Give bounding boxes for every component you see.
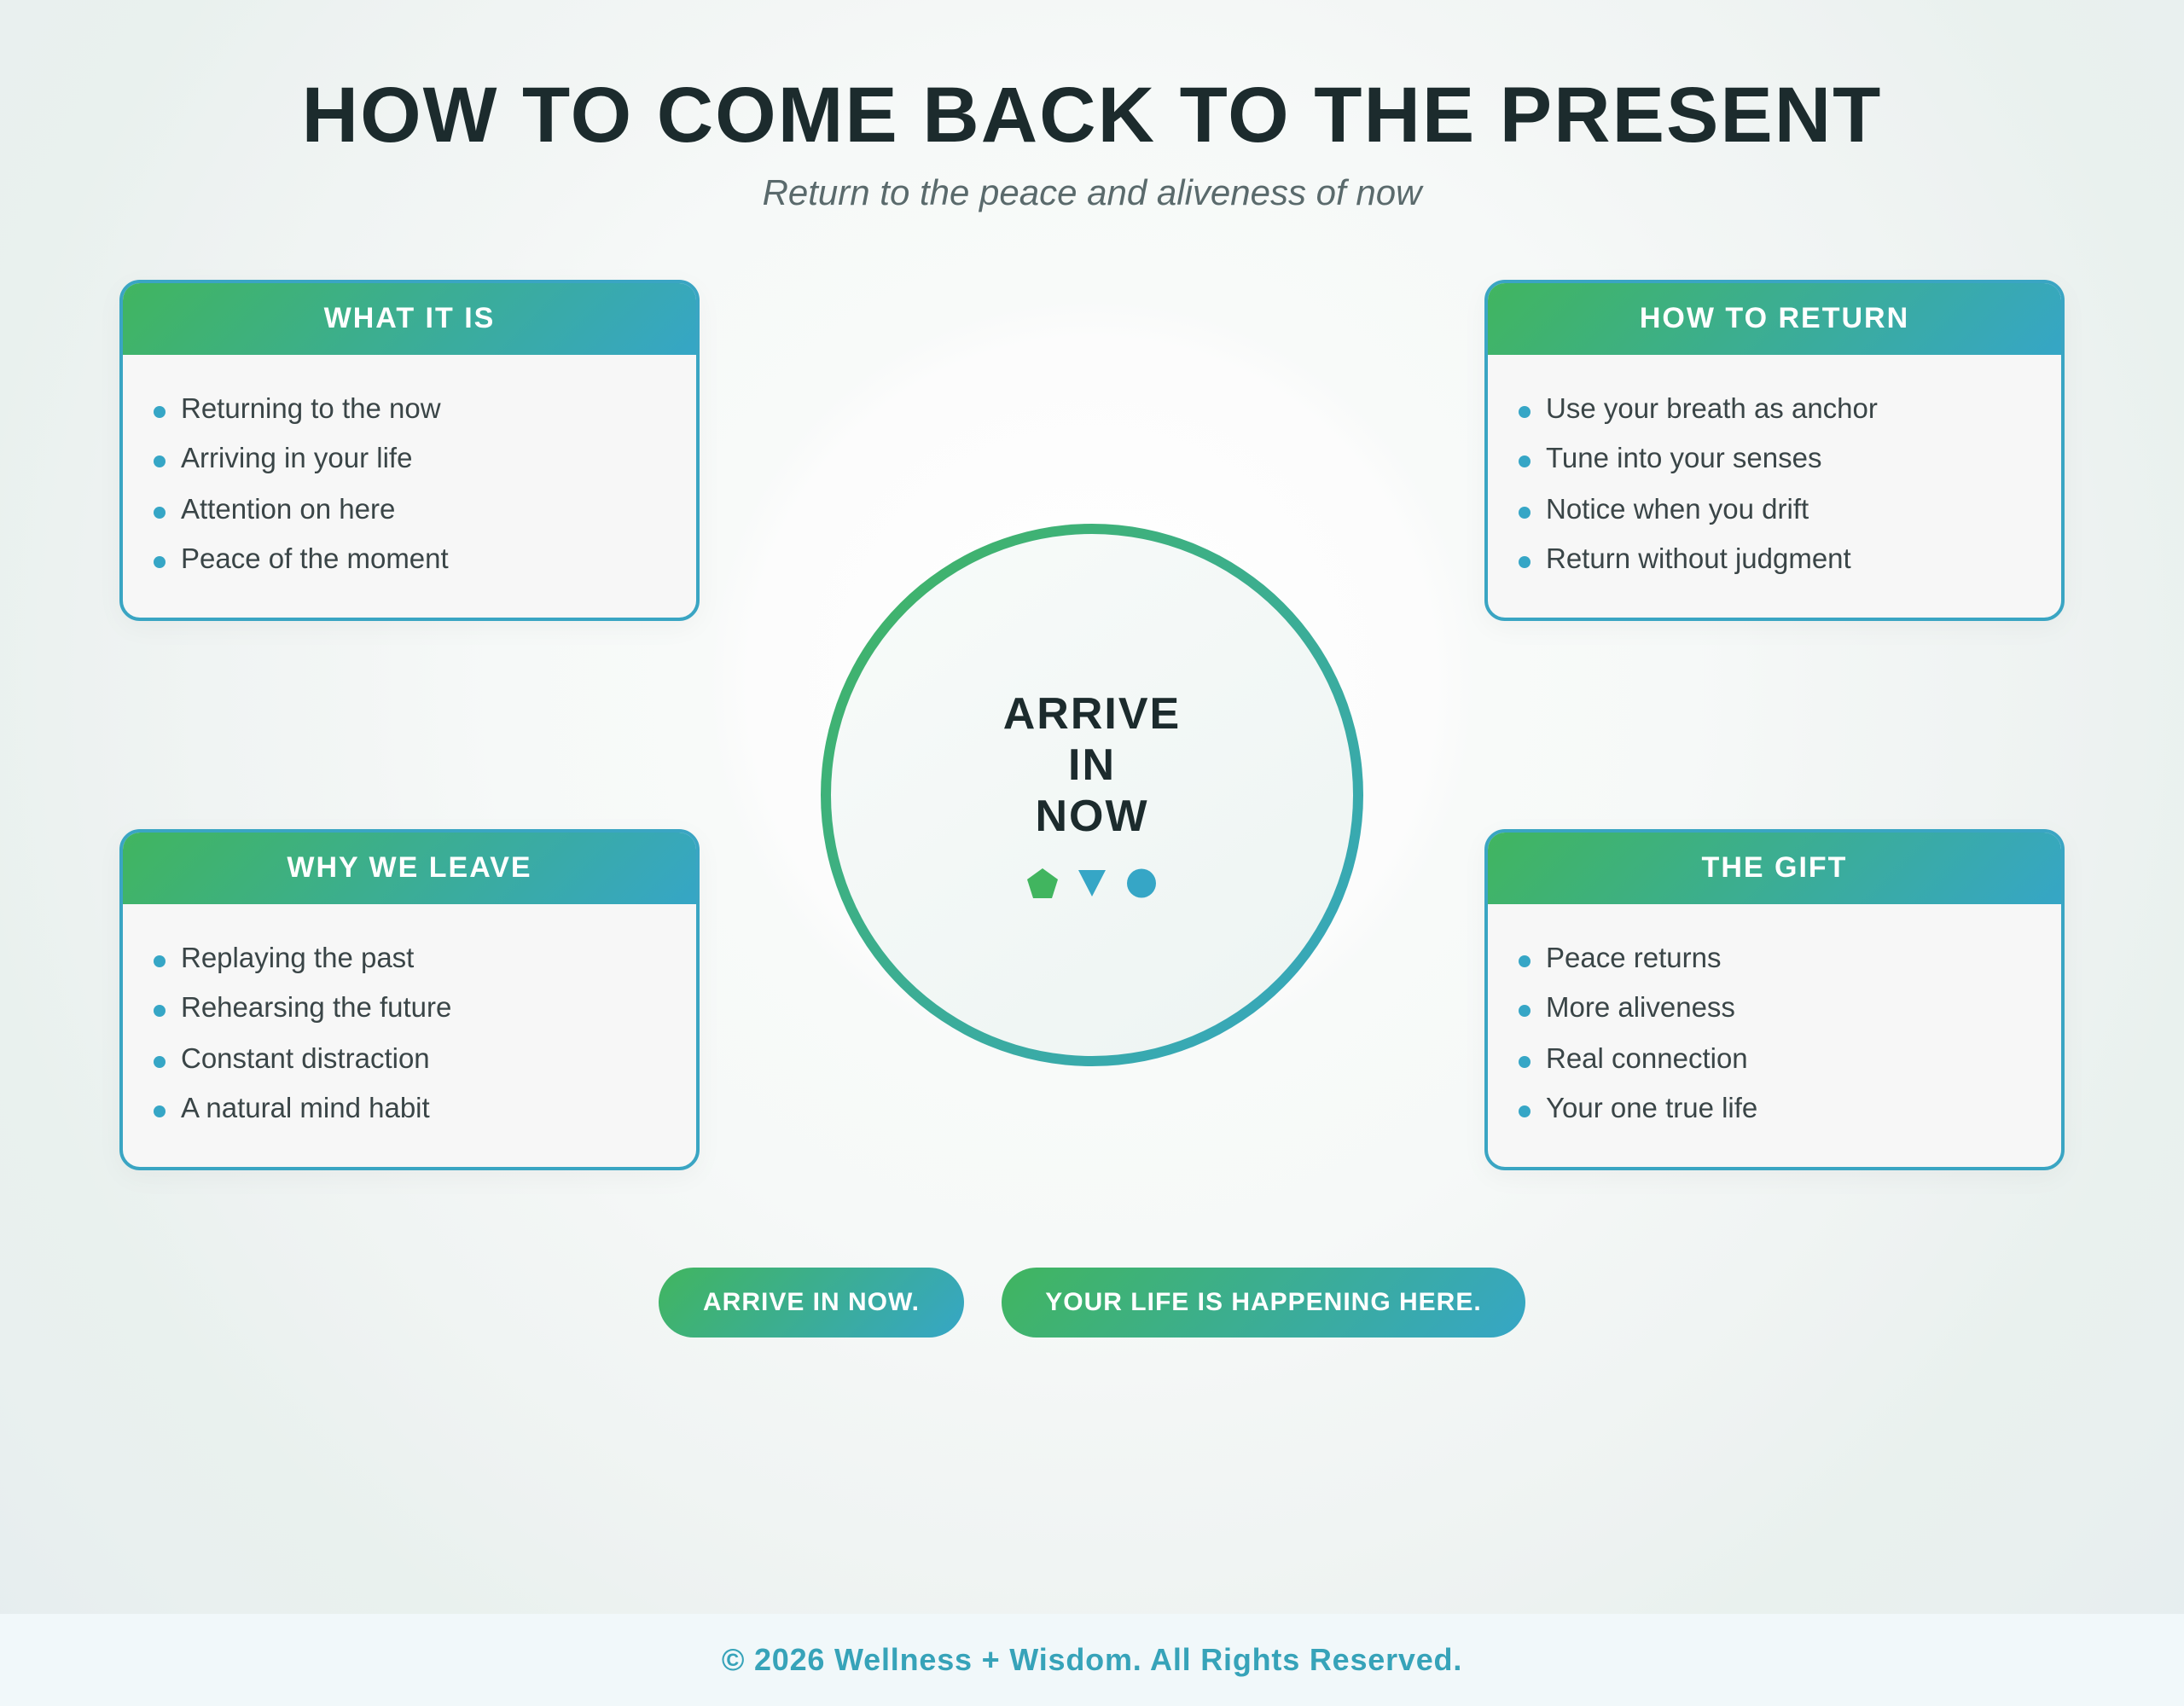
heading: why we leave <box>123 831 696 904</box>
panel: what it is <box>119 280 700 621</box>
center text: NOW <box>1035 792 1149 841</box>
footer: © 2026 Wellness + Wisdom. All Rights Reserved. <box>722 1642 1462 1677</box>
heading: why we leave: WHY WE LEAVE <box>287 851 532 884</box>
heading: how to return: HOW TO RETURN <box>1640 302 1909 334</box>
panel: the gift <box>1484 829 2065 1170</box>
list item: Tune into your senses <box>1546 442 1821 473</box>
list item: More aliveness <box>1546 991 1735 1023</box>
list item: Arriving in your life <box>181 442 412 473</box>
callout pill: arrive in now <box>659 1268 964 1338</box>
subtitle: Return to the peace and aliveness of now <box>763 172 1421 212</box>
list item: Constant distraction <box>181 1042 430 1074</box>
list item: Return without judgment <box>1546 543 1851 574</box>
center text <box>1003 689 1181 841</box>
center text: IN <box>1068 740 1116 790</box>
icon: pentagon <box>1027 868 1058 898</box>
footer <box>0 1614 2184 1706</box>
list item: Rehearsing the future <box>181 991 451 1023</box>
list item: Peace of the moment <box>181 543 449 574</box>
panel: how to return <box>1484 280 2065 621</box>
list item: Returning to the now <box>181 392 441 424</box>
callout pill: your life is happening here: YOUR LIFE IS HAPPENING HERE. <box>1045 1288 1482 1316</box>
heading: the gift: THE GIFT <box>1702 851 1847 884</box>
list item: Peace returns <box>1546 942 1721 973</box>
callout pill: your life is happening here <box>1002 1268 1525 1338</box>
list item: Your one true life <box>1546 1092 1757 1123</box>
heading: what it is <box>123 281 696 355</box>
icon: triangle <box>1078 870 1106 897</box>
circle inner fill <box>831 534 1353 1056</box>
list item: Use your breath as anchor <box>1546 392 1878 424</box>
list item: Attention on here <box>181 493 395 525</box>
heading: the gift <box>1488 831 2061 904</box>
panel: why we leave <box>119 829 700 1170</box>
list item: A natural mind habit <box>181 1092 430 1123</box>
list item: Notice when you drift <box>1546 493 1809 525</box>
heading: how to return <box>1488 281 2061 355</box>
list item: Replaying the past <box>181 942 414 973</box>
icon: circle <box>1127 868 1156 897</box>
callout pill: arrive in now: ARRIVE IN NOW. <box>703 1288 920 1316</box>
center circle <box>821 524 1363 1066</box>
heading: what it is: WHAT IT IS <box>324 302 495 334</box>
center text: ARRIVE <box>1003 689 1181 739</box>
list item: Real connection <box>1546 1042 1748 1074</box>
title: HOW TO COME BACK TO THE PRESENT <box>302 72 1882 159</box>
